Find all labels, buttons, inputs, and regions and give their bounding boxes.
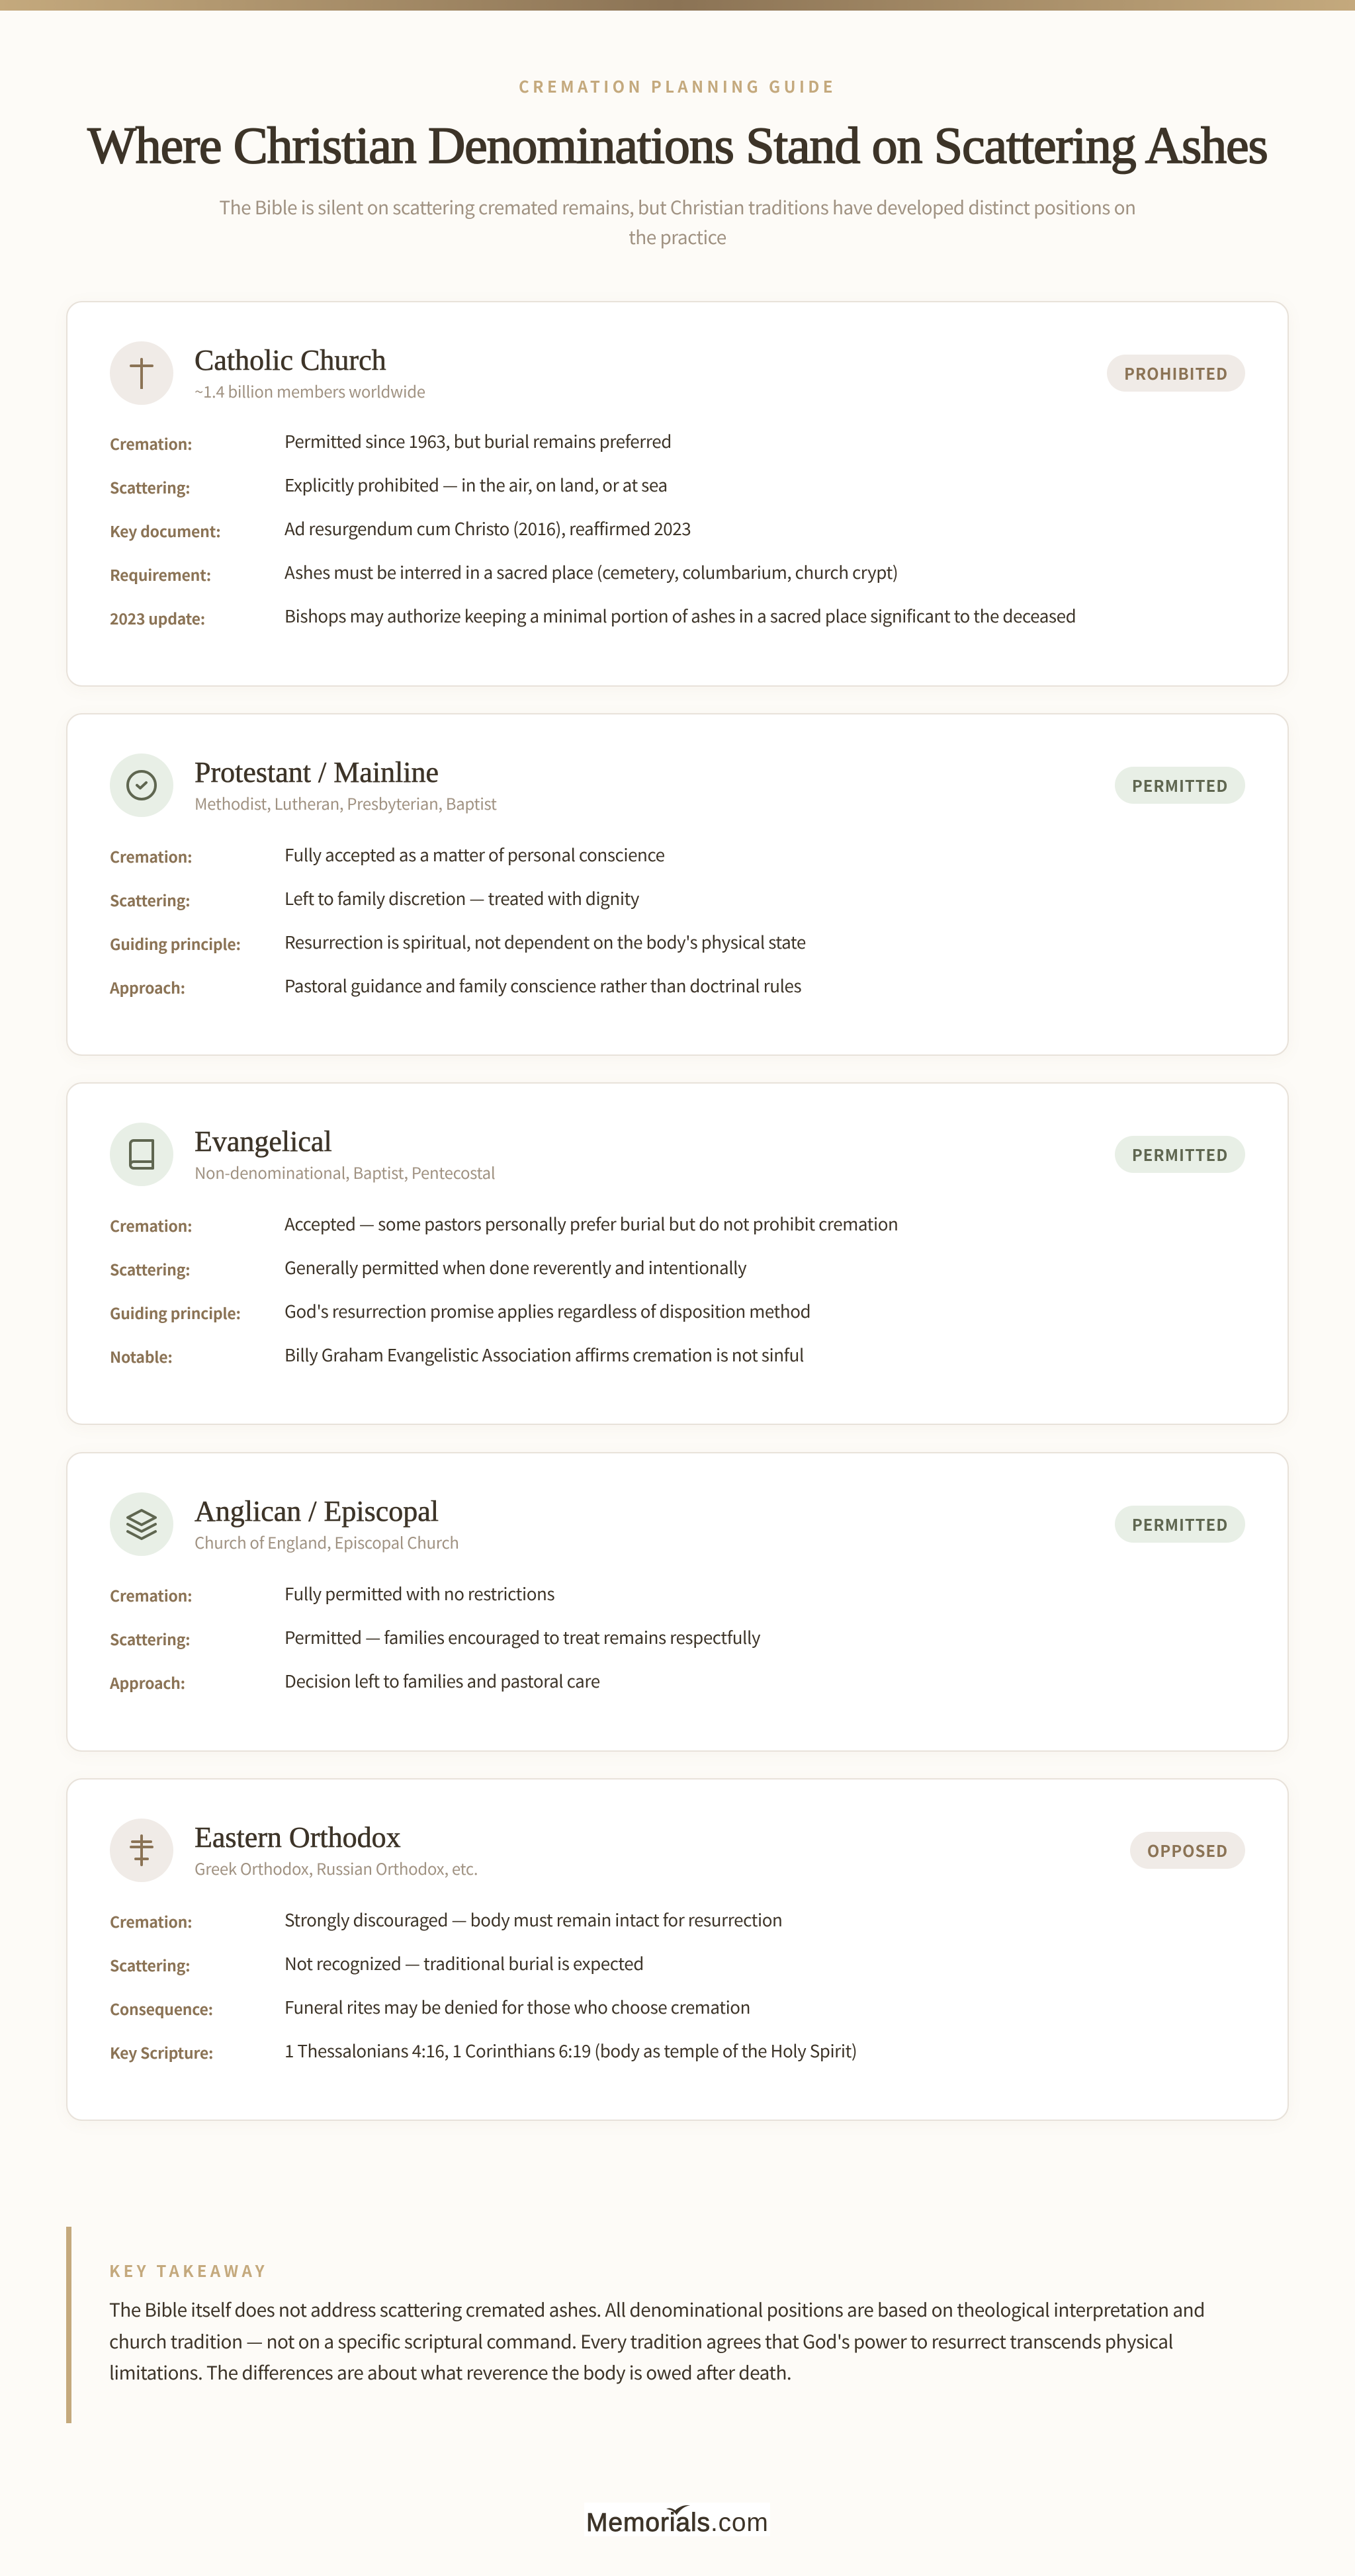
heading: Eastern Orthodox: Eastern Orthodox — [195, 1821, 401, 1854]
label: scattering: Scattering: — [110, 888, 190, 911]
icon: book — [110, 1123, 173, 1186]
label: scattering: Scattering: — [110, 1953, 190, 1976]
callout body — [109, 2296, 1205, 2385]
status badge: permitted — [1115, 1136, 1245, 1173]
logo: Memorials.com — [584, 2503, 770, 2536]
label: approach: Approach: — [110, 976, 185, 998]
label: scattering: Scattering: — [110, 476, 190, 498]
value: approach: Decision left to families and pastoral care — [284, 1668, 600, 1693]
value: 2023 update: Bishops may authorize keeping a minimal portion of ashes in a sacred place significant to the deceased — [284, 603, 1076, 628]
icon: layers — [110, 1492, 173, 1556]
status badge: opposed: OPPOSED — [1147, 1838, 1228, 1862]
label: cremation: Cremation: — [110, 432, 192, 454]
logo wordmark: Memorials.com — [586, 2509, 769, 2537]
heading: Protestant / Mainline: Protestant / Mainline — [195, 756, 439, 789]
label: key document: Key document: — [110, 519, 220, 542]
icon: bird — [666, 2505, 690, 2515]
value: guiding principle: Resurrection is spiritual, not dependent on the body's physical state — [284, 929, 806, 954]
callout heading: key takeaway: KEY TAKEAWAY — [109, 2258, 268, 2282]
status badge: opposed — [1130, 1832, 1245, 1869]
value: scattering: Left to family discretion — treated with dignity — [284, 886, 639, 910]
member traditions: Non-denominational, Baptist, Pentecostal — [195, 1160, 495, 1183]
label: guiding principle: Guiding principle: — [110, 1301, 241, 1324]
title: Where Christian Denominations Stand on Scattering Ashes — [87, 116, 1268, 174]
panel: Catholic Church — [66, 301, 1289, 687]
callout body: church tradition — not on a specific scriptural command. Every tradition agrees that God's power to resurrect transcends physical — [109, 2328, 1173, 2354]
value: scattering: Permitted — families encouraged to treat remains respectfully — [284, 1625, 760, 1649]
eyebrow: CREMATION PLANNING GUIDE — [519, 74, 836, 97]
status badge: prohibited — [1107, 355, 1245, 392]
icon: check circle — [110, 753, 173, 817]
member traditions: Greek Orthodox, Russian Orthodox, etc. — [195, 1856, 478, 1879]
panel: Eastern Orthodox — [66, 1778, 1289, 2121]
value: consequence: Funeral rites may be denied for those who choose cremation — [284, 1995, 750, 2019]
label: cremation: Cremation: — [110, 845, 192, 867]
value: cremation: Fully accepted as a matter of personal conscience — [284, 842, 665, 867]
value: key document: Ad resurgendum cum Christo (2016), reaffirmed 2023 — [284, 516, 691, 540]
label: guiding principle: Guiding principle: — [110, 932, 241, 955]
member traditions: Methodist, Lutheran, Presbyterian, Baptist — [195, 791, 497, 814]
panel: Anglican / Episcopal — [66, 1452, 1289, 1752]
value: cremation: Fully permitted with no restrictions — [284, 1581, 554, 1606]
status badge: prohibited: PROHIBITED — [1124, 361, 1228, 384]
label: scattering: Scattering: — [110, 1258, 190, 1280]
heading: Anglican / Episcopal: Anglican / Episcopal — [195, 1495, 439, 1527]
membership note: ~1.4 billion members worldwide — [195, 379, 425, 402]
value: key scripture: 1 Thessalonians 4:16, 1 Corinthians 6:19 (body as temple of the Holy Spirit) — [284, 2038, 857, 2063]
value: requirement: Ashes must be interred in a sacred place (cemetery, columbarium, church crypt) — [284, 560, 898, 584]
status badge: permitted — [1115, 1506, 1245, 1543]
callout: accent bar — [66, 2227, 71, 2423]
subtitle: The Bible is silent on scattering cremated remains, but Christian traditions have developed distinct positions on — [219, 194, 1136, 220]
heading: Evangelical: Evangelical — [195, 1125, 332, 1158]
status badge: permitted: PERMITTED — [1132, 1512, 1228, 1535]
label: approach: Approach: — [110, 1671, 185, 1694]
value: scattering: Explicitly prohibited — in the air, on land, or at sea — [284, 472, 668, 497]
member traditions: Church of England, Episcopal Church — [195, 1530, 459, 1553]
label: 2023 update: 2023 update: — [110, 607, 205, 629]
status badge: permitted: PERMITTED — [1132, 1142, 1228, 1166]
value: guiding principle: God's resurrection promise applies regardless of disposition method — [284, 1299, 810, 1323]
callout body: The Bible itself does not address scattering cremated ashes. All denominational positions are based on theological interpretation and — [109, 2296, 1205, 2323]
panel: Evangelical — [66, 1082, 1289, 1425]
value: cremation: Permitted since 1963, but burial remains preferred — [284, 429, 672, 453]
label: cremation: Cremation: — [110, 1214, 192, 1236]
subtitle: the practice — [629, 224, 726, 250]
label: key scripture: Key Scripture: — [110, 2041, 213, 2063]
label: scattering: Scattering: — [110, 1627, 190, 1650]
status badge: permitted: PERMITTED — [1132, 773, 1228, 796]
label: requirement: Requirement: — [110, 563, 211, 585]
subtitle — [219, 194, 1136, 250]
callout body: limitations. The differences are about what reverence the body is owed after death. — [109, 2359, 791, 2385]
panel: Protestant / Mainline — [66, 713, 1289, 1056]
value: scattering: Generally permitted when done reverently and intentionally — [284, 1255, 746, 1279]
heading: Catholic Church: Catholic Church — [195, 344, 386, 376]
icon: orthodox cross — [110, 1819, 173, 1882]
label: cremation: Cremation: — [110, 1584, 192, 1606]
value: scattering: Not recognized — traditional burial is expected — [284, 1951, 644, 1975]
icon: latin cross — [110, 341, 173, 405]
value: cremation: Accepted — some pastors personally prefer burial but do not prohibit cremation — [284, 1211, 898, 1236]
top gradient bar — [0, 0, 1355, 11]
value: approach: Pastoral guidance and family conscience rather than doctrinal rules — [284, 973, 801, 998]
label: consequence: Consequence: — [110, 1997, 213, 2020]
label: cremation: Cremation: — [110, 1910, 192, 1932]
label: notable: Notable: — [110, 1345, 173, 1367]
status badge: permitted — [1115, 767, 1245, 804]
value: notable: Billy Graham Evangelistic Association affirms cremation is not sinful — [284, 1342, 804, 1367]
value: cremation: Strongly discouraged — body must remain intact for resurrection — [284, 1907, 782, 1932]
